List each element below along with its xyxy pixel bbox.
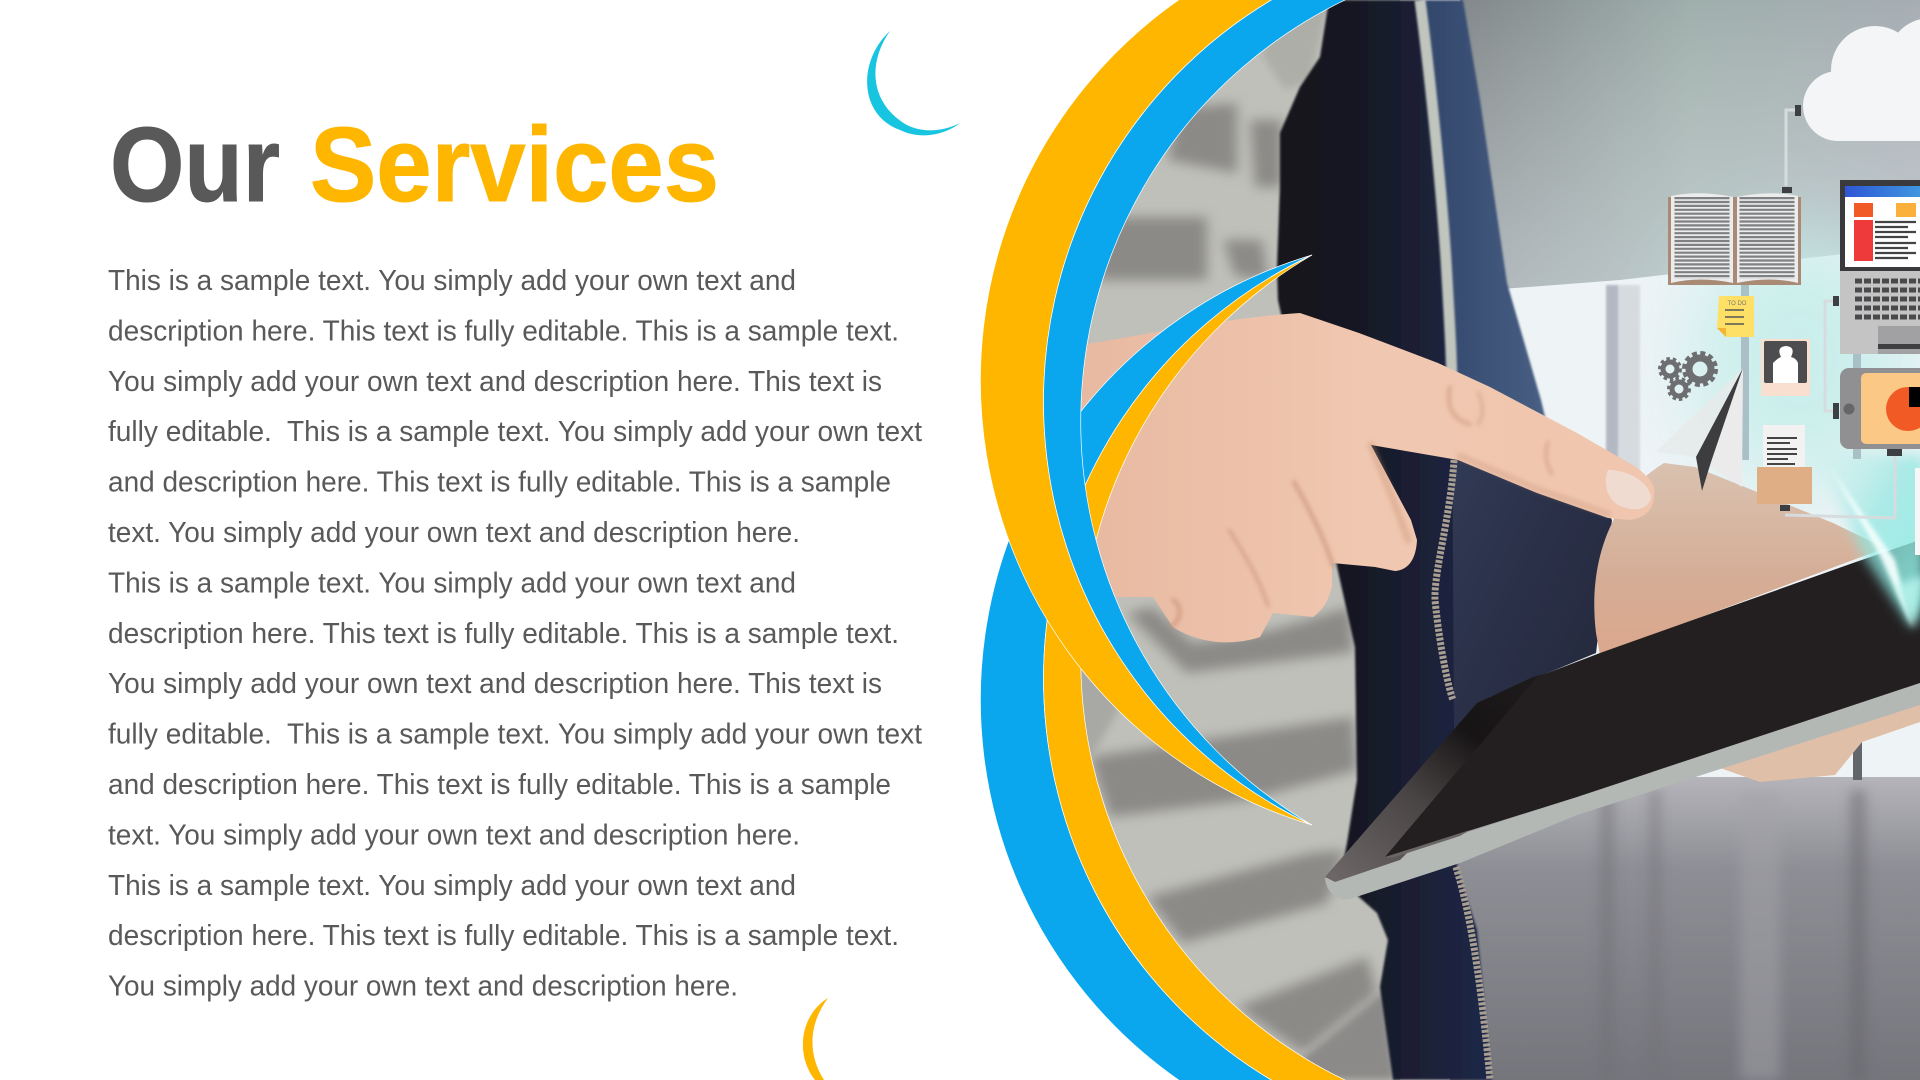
hand shadows [1172, 387, 1608, 626]
crescent pair: lower blue and orange [980, 255, 1347, 1080]
connector ports [1780, 105, 1902, 511]
icon: open book [1668, 193, 1801, 285]
shirt fold lighter and shaded areas [1081, 10, 1394, 1080]
title [110, 106, 719, 224]
body text: fully editable. This is a sample text. You simply add your own text [108, 719, 922, 751]
hand behind tablet [1720, 703, 1920, 782]
body text: You simply add your own text and description here. This text is [108, 366, 882, 398]
icon: paper plane [1656, 368, 1743, 491]
holding hand [1594, 463, 1885, 655]
icon: cloud [1803, 18, 1920, 141]
tablet [1325, 540, 1920, 900]
jacket zipper lower [1435, 460, 1490, 1080]
lower sleeve [1452, 459, 1612, 729]
title: Our [110, 106, 280, 224]
body text: You simply add your own text and description here. [108, 971, 738, 1003]
tablet silver frame [1325, 683, 1920, 900]
jacket zipper upper [1420, 0, 1452, 400]
jacket [1277, 0, 1492, 1080]
body text: and description here. This text is fully editable. This is a sample [108, 467, 891, 499]
crescent pair: upper orange and blue [980, 0, 1347, 825]
body text: You simply add your own text and description here. This text is [108, 668, 882, 700]
jacket sleeve [1418, 0, 1547, 417]
icon: white panel [1915, 468, 1920, 555]
photo background: window post [1606, 285, 1640, 475]
decorative orange crescent [803, 998, 828, 1080]
body text: text. You simply add your own text and description here. [108, 819, 800, 851]
body text: description here. This text is fully editable. This is a sample text. [108, 920, 899, 952]
icon: document in box [1757, 425, 1812, 504]
floor reflections [1600, 790, 1866, 1080]
photo background: bright window [1508, 254, 1920, 777]
body text: This is a sample text. You simply add your own text and [108, 265, 796, 297]
photo: man pointing at tablet [1040, 0, 1920, 1080]
connector poles [1741, 285, 1861, 460]
decorative cyan crescent [867, 31, 960, 135]
icon: portrait frame [1761, 339, 1810, 396]
tablet screen [1385, 540, 1920, 857]
light beam [1815, 455, 1920, 628]
body text: fully editable. This is a sample text. You simply add your own text [108, 416, 922, 448]
icon: gears [1660, 353, 1716, 400]
body text: This is a sample text. You simply add your own text and [108, 870, 796, 902]
icon: laptop [1840, 180, 1920, 354]
tablet bezel [1325, 674, 1546, 882]
icon: to-do note [1717, 296, 1754, 337]
title: Services [310, 106, 719, 224]
tablet bezel strip [1385, 830, 1470, 858]
body text: text. You simply add your own text and description here. [108, 517, 800, 549]
photo background: mint glow [1690, 230, 1910, 490]
pointing hand [1078, 313, 1654, 642]
body text [108, 265, 922, 1003]
window post behind tablet [1853, 742, 1862, 780]
icon: phone with pie chart [1840, 368, 1920, 449]
body text: and description here. This text is fully editable. This is a sample [108, 769, 891, 801]
body text: description here. This text is fully editable. This is a sample text. [108, 315, 899, 347]
body text: This is a sample text. You simply add your own text and [108, 567, 796, 599]
body text: description here. This text is fully editable. This is a sample text. [108, 618, 899, 650]
infographic connectors [1785, 110, 1895, 518]
fingernail [1606, 470, 1651, 509]
icon: to-do note: TO DO [1728, 301, 1747, 307]
photo background: sky [1460, 0, 1920, 310]
photo background: floor [1450, 777, 1920, 1080]
shirt [1081, 0, 1400, 1080]
